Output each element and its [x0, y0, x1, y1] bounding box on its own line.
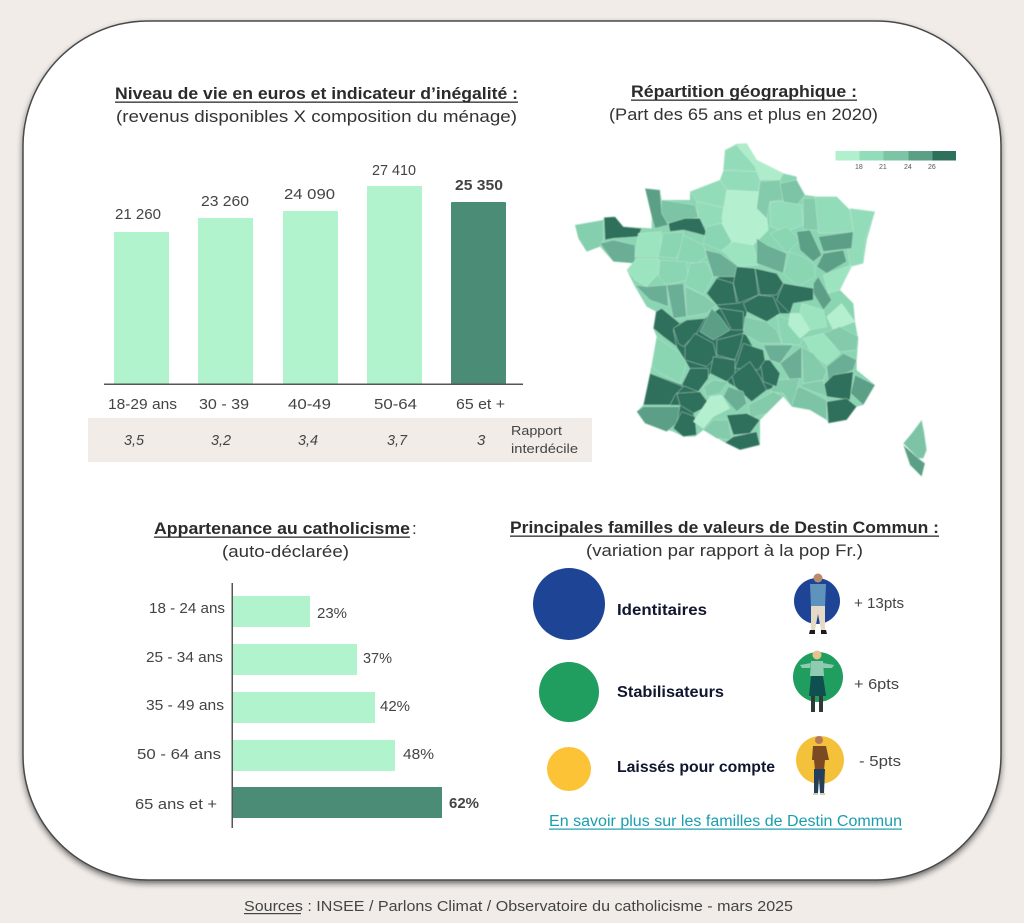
bar chart: income by age: 27 410 — [372, 162, 416, 179]
bar chart: catholicism by age: 42% — [380, 698, 410, 715]
bar chart: income by age: 23 260 — [201, 193, 249, 210]
bar chart: catholicism by age: 48% — [403, 746, 434, 763]
heading: catholicism: Appartenance au catholicisme — [154, 519, 410, 538]
family: Identitaires — [533, 568, 904, 640]
sources footer: Sources : INSEE / Parlons Climat / Observatoire du catholicisme - mars 2025 — [244, 898, 793, 915]
bar chart: catholicism by age — [135, 583, 479, 828]
bar chart: income by age: 50-64 — [374, 396, 417, 413]
icon: person yellow — [812, 736, 829, 795]
bar chart: income by age: 65 et + — [456, 396, 505, 413]
bar chart: catholicism by age: 25 - 34 ans — [146, 649, 223, 666]
heading: income chart — [115, 84, 518, 126]
table: interdecile ratio: 3,2 — [211, 432, 232, 449]
map legend: 26 — [928, 164, 936, 171]
heading: income chart: (revenus disponibles X composition du ménage) — [116, 107, 517, 126]
bar chart: income by age: 21 260 — [115, 206, 161, 223]
map legend: 21 — [879, 164, 887, 171]
family: Stabilisateurs — [539, 650, 899, 722]
bar chart: catholicism by age: 23% — [317, 605, 347, 622]
table: interdecile ratio: 3 — [477, 432, 486, 449]
map legend: 24 — [904, 164, 912, 171]
heading: catholicism — [154, 519, 417, 561]
map legend: 18 — [855, 164, 863, 171]
table: interdecile ratio: Rapport — [511, 423, 562, 438]
bar chart: catholicism by age: 35 - 49 ans — [146, 697, 224, 714]
family: Laissés pour compte: Laissés pour compte — [617, 759, 775, 776]
family: Laissés pour compte — [547, 736, 901, 795]
table: interdecile ratio: 3,7 — [387, 432, 408, 449]
bar chart: catholicism by age: 18 - 24 ans — [149, 600, 225, 617]
bar chart: catholicism by age: 50 - 64 ans — [137, 746, 221, 763]
heading: catholicism: : — [412, 519, 417, 538]
table: interdecile ratio — [88, 418, 592, 462]
icon: person green — [800, 650, 834, 712]
heading: geographic distribution: (Part des 65 ans et plus en 2020) — [609, 105, 878, 124]
link: learn more: En savoir plus sur les familles de Destin Commun — [549, 813, 902, 830]
heading: value families: Principales familles de valeurs de Destin Commun : — [510, 518, 939, 537]
map: France by department — [575, 143, 927, 477]
family: Laissés pour compte: - 5pts — [859, 753, 901, 770]
bar chart: catholicism by age: 62% — [449, 795, 479, 812]
table: interdecile ratio: 3,4 — [298, 432, 318, 449]
bar chart: income by age: 30 - 39 — [199, 396, 249, 413]
heading: value families: (variation par rapport à la pop Fr.) — [586, 541, 863, 560]
bar chart: income by age: 40-49 — [288, 396, 331, 413]
table: interdecile ratio: interdécile — [511, 441, 578, 456]
heading: income chart: Niveau de vie en euros et indicateur d’inégalité : — [115, 84, 518, 103]
family: Identitaires: Identitaires — [617, 602, 707, 619]
family: Identitaires: + 13pts — [854, 595, 904, 612]
map legend — [836, 151, 956, 171]
bar chart: income by age: 25 350 — [455, 177, 503, 194]
heading: catholicism: (auto-déclarée) — [222, 542, 349, 561]
family: Stabilisateurs: Stabilisateurs — [617, 684, 724, 701]
bar chart: catholicism by age: 37% — [363, 650, 392, 667]
heading: geographic distribution: Répartition géographique : — [631, 82, 857, 101]
bar chart: income by age: 24 090 — [284, 186, 335, 203]
heading: value families — [510, 518, 939, 560]
heading: geographic distribution — [609, 82, 878, 124]
bar chart: income by age — [104, 162, 523, 413]
table: interdecile ratio: 3,5 — [124, 432, 145, 449]
bar chart: catholicism by age: 65 ans et + — [135, 796, 217, 813]
icon: person blue — [809, 574, 827, 634]
family: Stabilisateurs: + 6pts — [854, 676, 899, 693]
bar chart: income by age: 18-29 ans — [108, 396, 177, 413]
